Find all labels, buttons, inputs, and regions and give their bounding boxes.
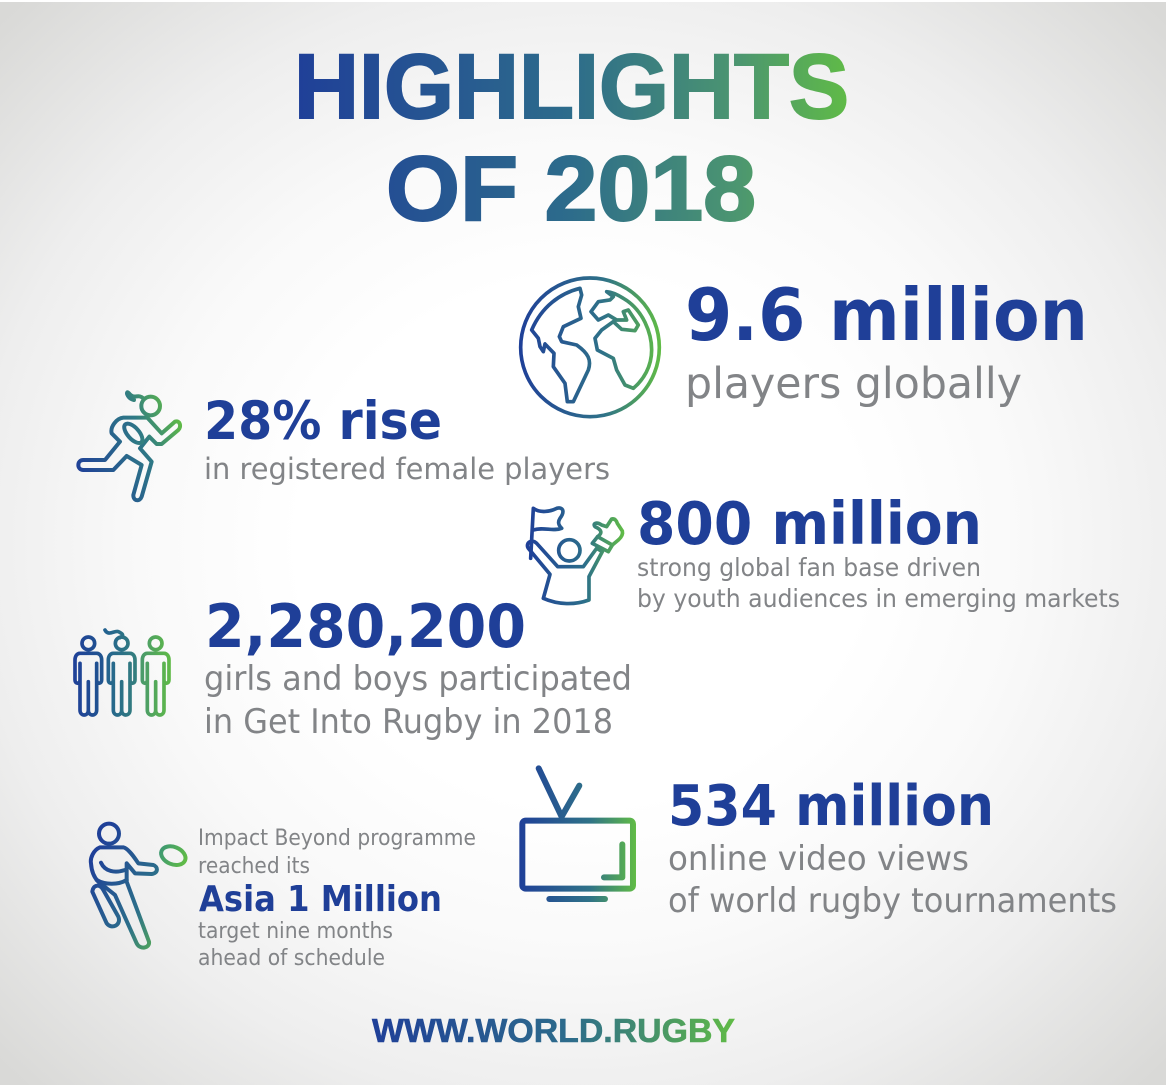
stat: Get Into Rugby: 2,280,200 <box>205 592 526 662</box>
stat: fan base: strong global fan base driven <box>637 553 981 582</box>
stat: Get Into Rugby <box>204 592 632 742</box>
website url: WWW.WORLD.RUGBY <box>372 1012 735 1049</box>
stat: Asia 1 Million: reached its <box>198 854 310 879</box>
stat: fan base: by youth audiences in emerging markets <box>637 584 1120 613</box>
stat: Asia 1 Million: target nine months <box>198 919 393 944</box>
stat: Asia 1 Million: Impact Beyond programme <box>198 826 476 851</box>
stat: Get Into Rugby: in Get Into Rugby in 2018 <box>204 702 613 742</box>
stat: Asia 1 Million: ahead of schedule <box>198 946 385 971</box>
stat: online video views <box>668 774 1117 921</box>
icon: three children <box>75 630 169 715</box>
icon: television <box>522 768 633 899</box>
stat: players globally <box>685 273 1088 409</box>
stat: online video views: online video views <box>668 839 969 879</box>
stat: players globally: players globally <box>685 359 1022 409</box>
icon: globe <box>521 278 659 417</box>
icon: player throwing ball <box>91 824 188 948</box>
stat: fan base <box>637 489 1120 613</box>
stat: Asia 1 Million: Asia 1 Million <box>199 879 442 920</box>
stat: female players <box>204 391 610 486</box>
stat: online video views: of world rugby tournaments <box>668 881 1117 921</box>
title: OF 2018 <box>386 138 756 240</box>
stat: female players: in registered female players <box>204 452 610 486</box>
stat: online video views: 534 million <box>668 774 994 839</box>
stat: Asia 1 Million <box>198 826 476 971</box>
icon: female runner <box>78 392 180 500</box>
title <box>294 36 849 240</box>
stat: players globally: 9.6 million <box>685 273 1088 357</box>
stat: fan base: 800 million <box>637 489 982 558</box>
stat: female players: 28% rise <box>204 391 442 452</box>
icon: cheering fan <box>527 508 623 604</box>
stat: Get Into Rugby: girls and boys participated <box>204 659 632 699</box>
title: HIGHLIGHTS <box>294 36 849 138</box>
